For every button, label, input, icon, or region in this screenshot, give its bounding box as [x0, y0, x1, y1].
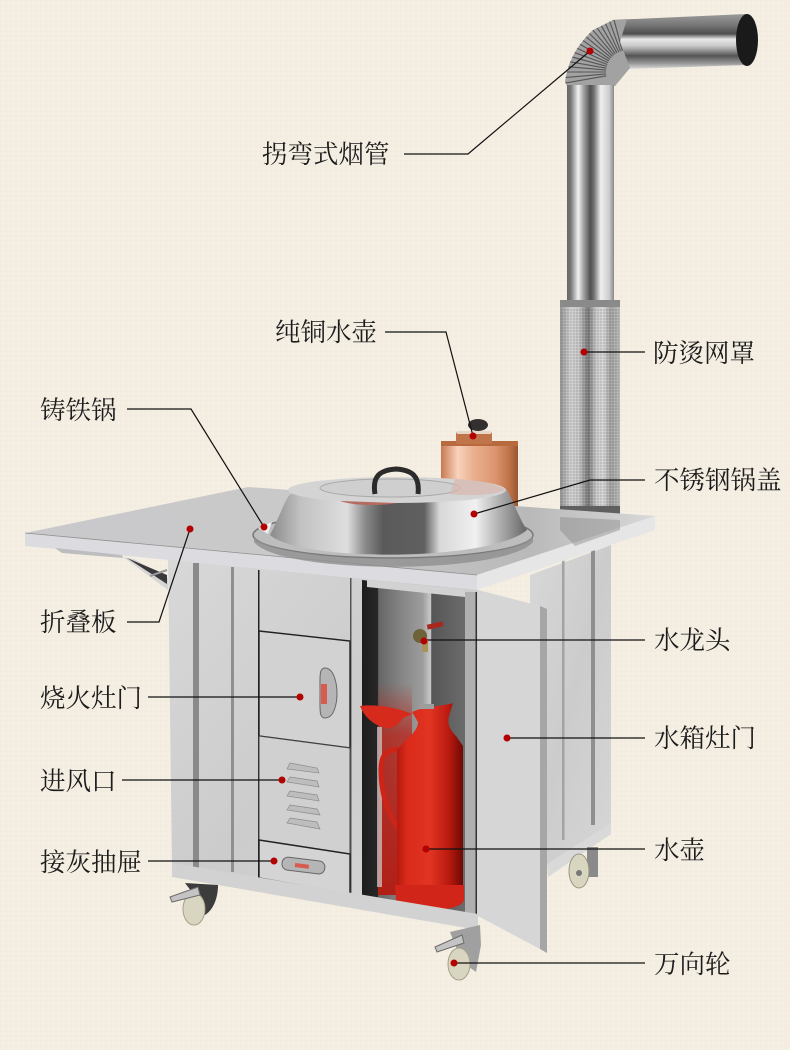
label: 水龙头: 水龙头 [654, 626, 731, 655]
label: 不锈钢锅盖: 不锈钢锅盖 [654, 466, 782, 495]
open water tank cavity [362, 580, 477, 914]
burner door panel [259, 631, 350, 748]
label: 进风口: 进风口 [40, 767, 117, 796]
wok rim [253, 512, 533, 567]
label: 烧火灶门 [40, 684, 304, 713]
label: 铸铁锅 [40, 396, 268, 530]
label: 水箱灶门: 水箱灶门 [654, 724, 756, 753]
heat guard mesh sleeve [560, 300, 620, 518]
label: 万向轮 [450, 950, 731, 979]
label: 水龙头 [413, 621, 731, 655]
label: 烧火灶门: 烧火灶门 [40, 684, 142, 713]
label: 不锈钢锅盖 [470, 466, 782, 518]
label: 水箱灶门 [504, 724, 756, 753]
open door [478, 590, 547, 953]
caster: rear right [569, 847, 598, 888]
folding bracket [123, 557, 168, 590]
ash drawer [259, 840, 350, 894]
stainless lid [270, 469, 527, 555]
chimney pipe [562, 8, 758, 302]
label: 防烫网罩: 防烫网罩 [653, 339, 755, 368]
tabletop folding board [25, 487, 655, 590]
icon: faucet [413, 621, 443, 652]
label: 水壶: 水壶 [654, 836, 705, 865]
label: 折叠板: 折叠板 [40, 608, 117, 637]
label: 铸铁锅: 铸铁锅 [40, 396, 117, 425]
label: 万向轮: 万向轮 [654, 950, 731, 979]
label: 纯铜水壶: 纯铜水壶 [275, 318, 377, 347]
label: 拐弯式烟管 [262, 48, 594, 169]
door handle [320, 668, 337, 718]
label: 接灰抽屉: 接灰抽屉 [40, 848, 142, 877]
label: 进风口 [40, 767, 286, 796]
cabinet front [168, 555, 478, 916]
rear right panel [530, 545, 611, 865]
label: 折叠板 [40, 526, 194, 637]
base rail [172, 863, 478, 930]
label: 纯铜水壶 [275, 318, 476, 440]
caster: front left [170, 883, 218, 925]
right rear lower rail [547, 823, 611, 877]
label: 水壶 [422, 836, 705, 865]
label: 拐弯式烟管: 拐弯式烟管 [262, 140, 390, 169]
copper kettle [441, 419, 518, 510]
red thermos flask [360, 703, 464, 910]
air vent panel [259, 736, 350, 854]
caster: front right [435, 925, 481, 980]
label: 接灰抽屉 [40, 848, 278, 877]
label: 防烫网罩 [580, 339, 755, 368]
